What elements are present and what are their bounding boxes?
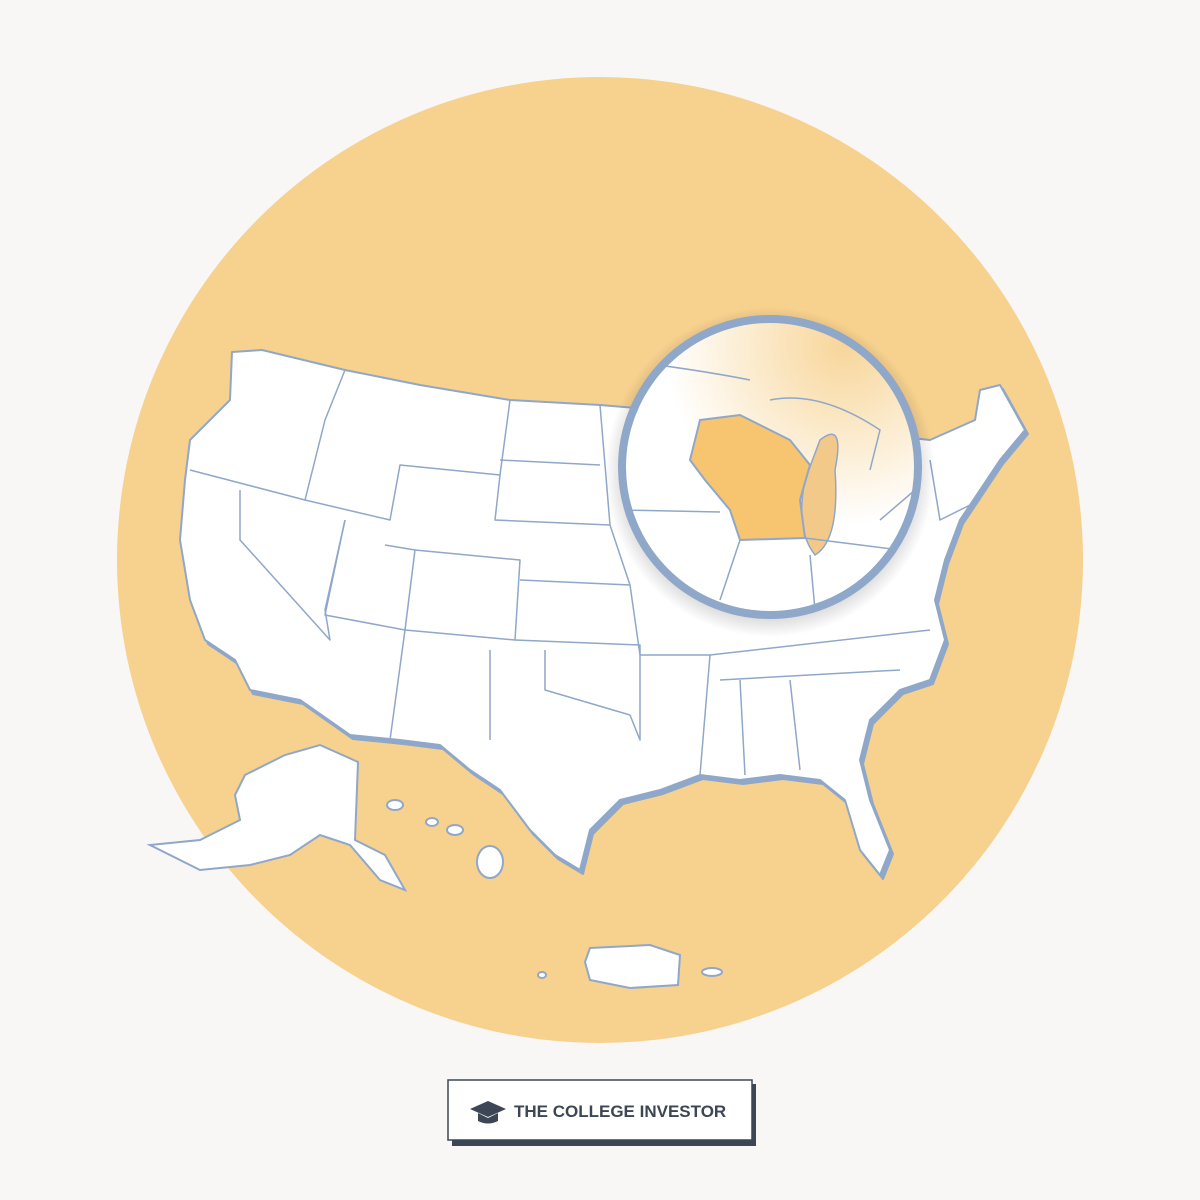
- map: contiguous US: [180, 350, 1028, 879]
- icon: graduation cap: [470, 1101, 506, 1124]
- map: Alaska: [150, 745, 405, 890]
- state borders (simplified): [190, 370, 980, 775]
- Wisconsin: [690, 415, 810, 540]
- infographic canvas: [117, 77, 1083, 1146]
- logo: THE COLLEGE INVESTOR: [514, 1102, 726, 1121]
- logo: [448, 1080, 756, 1146]
- background circle: [117, 77, 1083, 1043]
- magnifier: Wisconsin detail: [605, 307, 935, 637]
- map: Hawaii: [387, 800, 503, 878]
- map: Puerto Rico: [538, 945, 722, 988]
